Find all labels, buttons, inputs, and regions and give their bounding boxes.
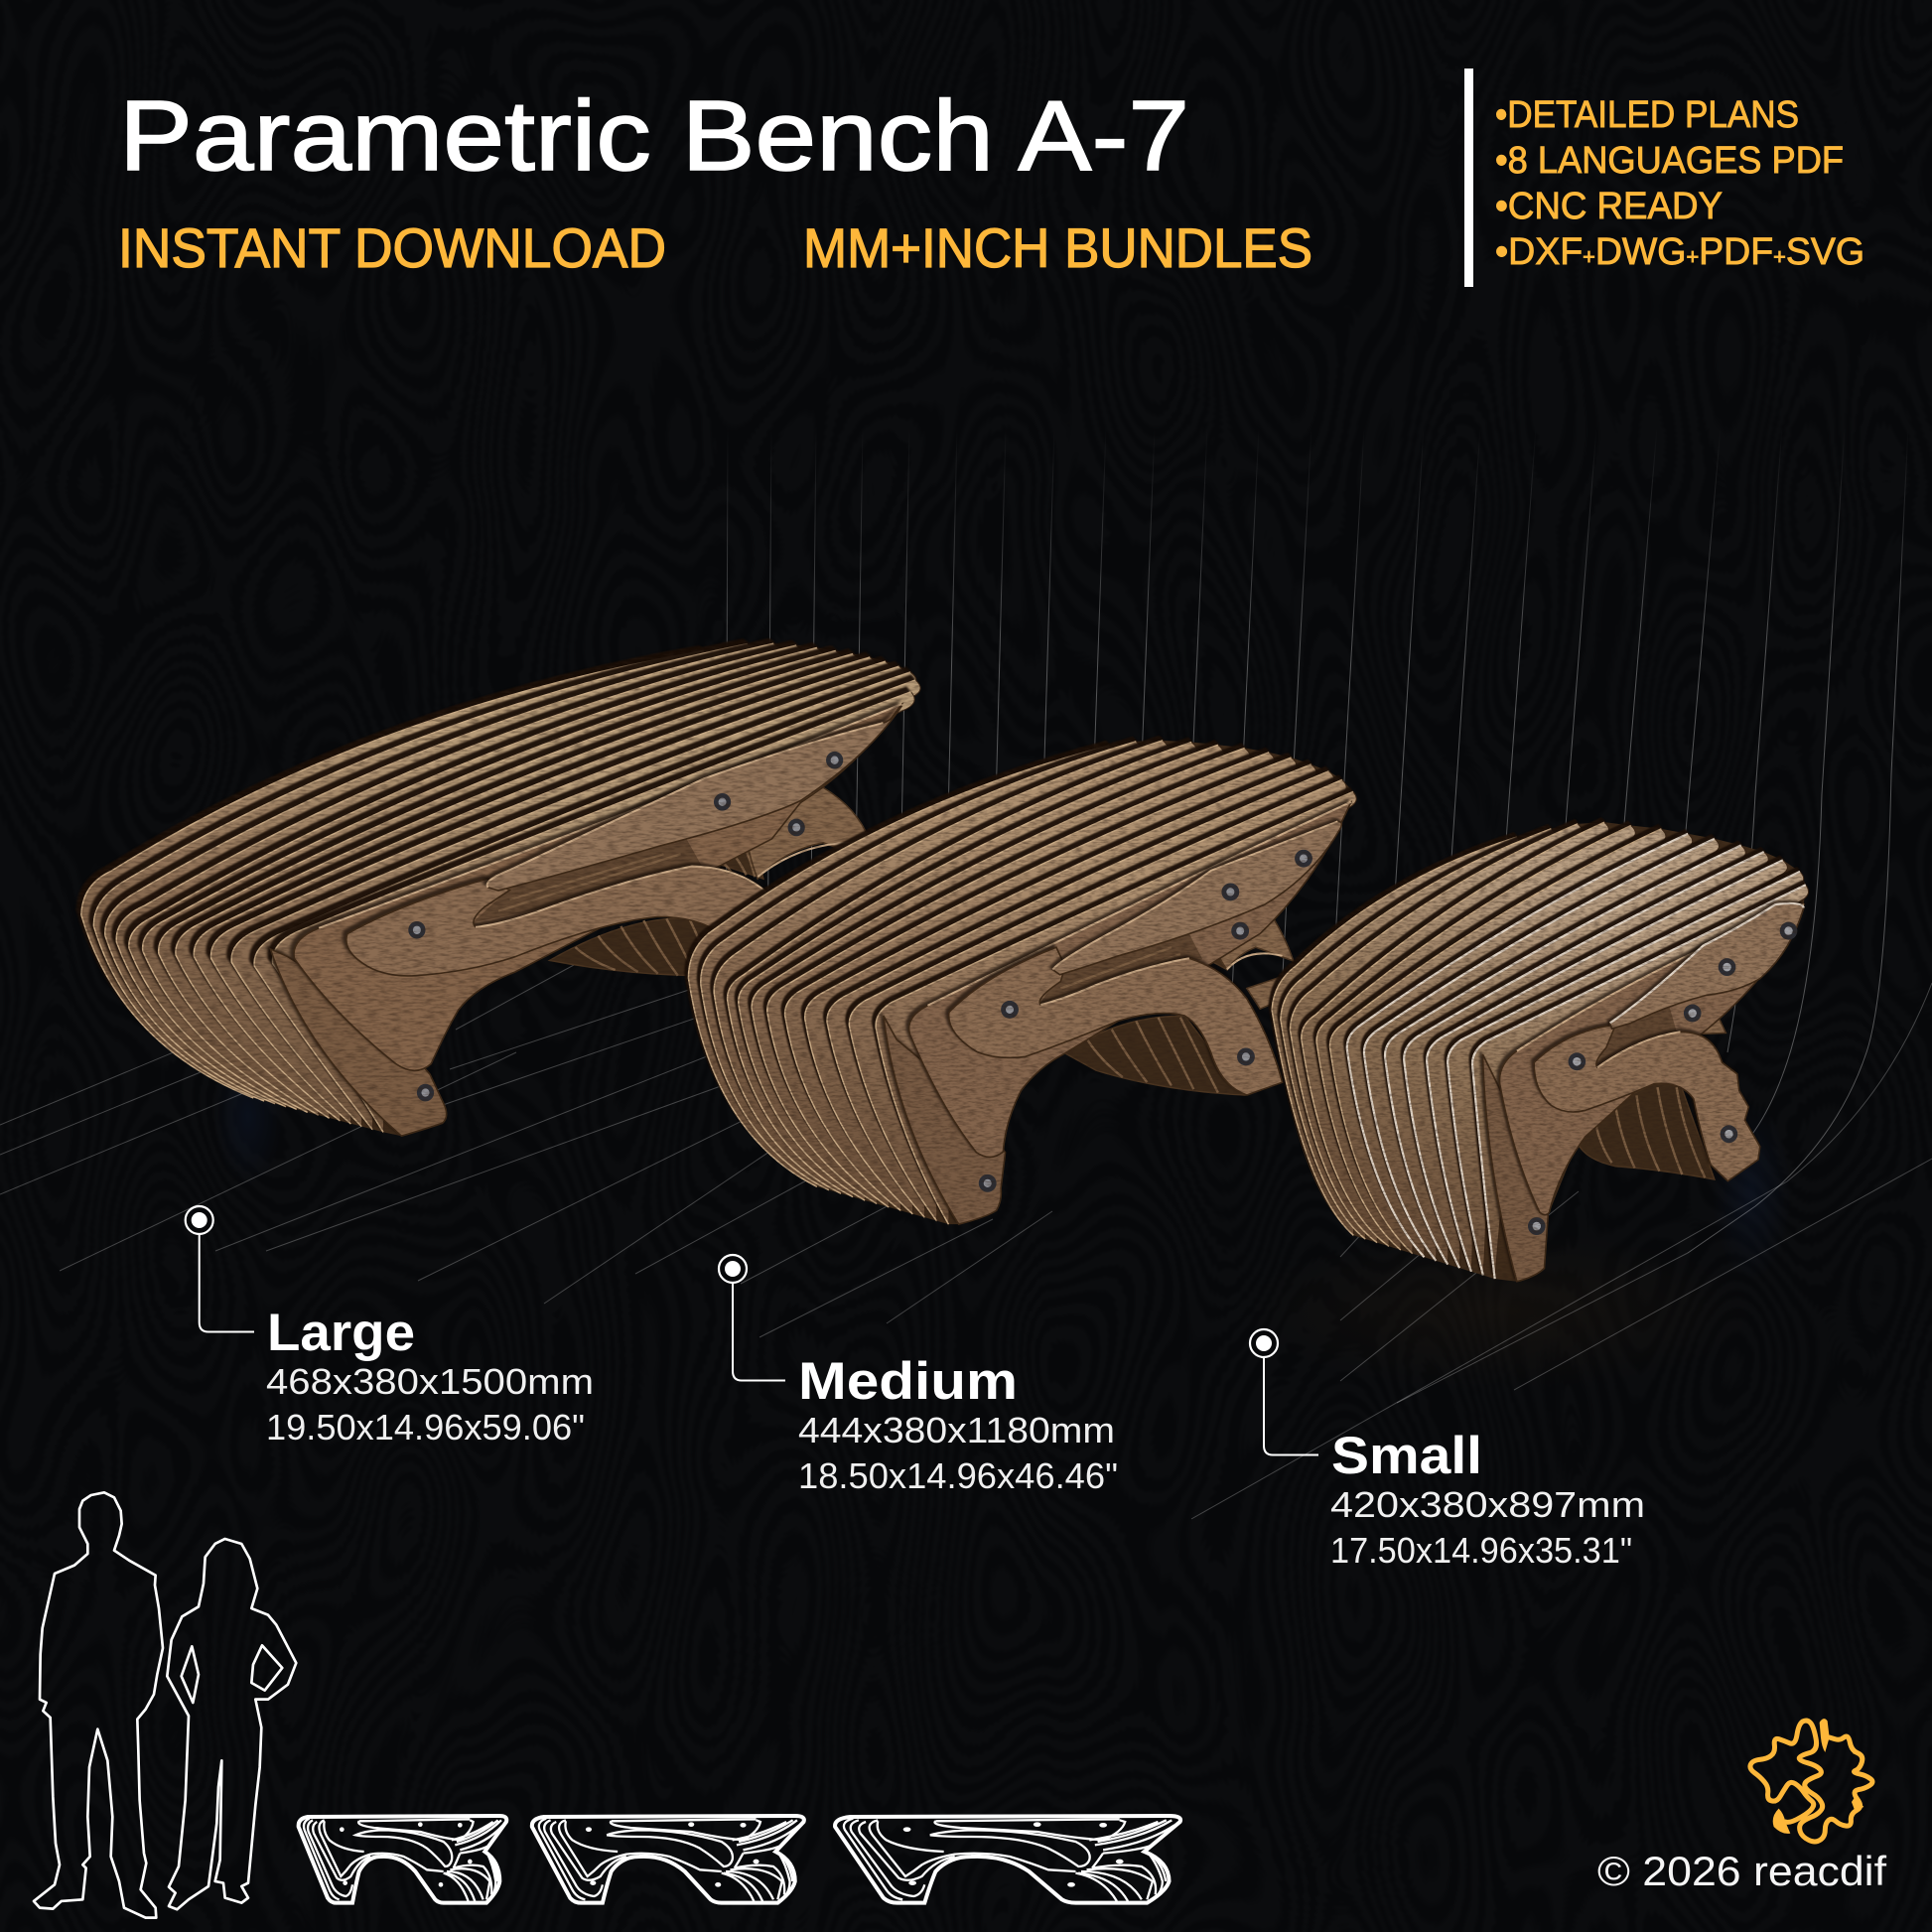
bolts <box>1528 922 1797 1235</box>
logo <box>1750 1719 1872 1842</box>
feature list: •CNC READY <box>1495 186 1723 227</box>
callout: small: 420x380x897mm <box>1330 1484 1645 1525</box>
vertical wall lines <box>726 427 1908 1253</box>
silhouette: man <box>34 1492 163 1918</box>
feature list: •DETAILED PLANS <box>1495 94 1799 136</box>
floor lines <box>0 953 1932 1519</box>
bench body base <box>84 643 915 1136</box>
front panels <box>270 704 901 1136</box>
feature list: •DXF+DWG+PDF+SVG <box>1495 231 1864 273</box>
callout: large: Large <box>267 1304 415 1362</box>
far leg and rear slats <box>550 787 869 976</box>
slats <box>81 643 920 1132</box>
callout: medium <box>719 1255 1118 1496</box>
icon: medium bench profile <box>532 1816 804 1903</box>
far leg and rear slats <box>1065 904 1294 1095</box>
slats <box>688 741 1356 1224</box>
subtitle: bundles: MM+INCH BUNDLES <box>803 216 1312 279</box>
callout: large: 19.50x14.96x59.06" <box>266 1407 585 1448</box>
bench: large <box>81 643 920 1136</box>
floor glow <box>213 1047 1791 1390</box>
bolts <box>979 850 1312 1192</box>
silhouette: woman <box>167 1539 296 1909</box>
title: Parametric Bench A-7 <box>119 80 1189 192</box>
copyright: © 2026 reacdif <box>1597 1848 1886 1894</box>
callout: small: Small <box>1331 1427 1482 1485</box>
feature list <box>1495 94 1864 273</box>
bench: small <box>1272 822 1809 1282</box>
bench: medium <box>688 741 1356 1224</box>
bench elevation icons <box>299 1816 1180 1903</box>
bench body base <box>690 741 1353 1224</box>
bench body base <box>1273 822 1806 1282</box>
human scale silhouettes <box>34 1492 296 1918</box>
callout: large <box>186 1206 594 1448</box>
icon: large bench profile <box>835 1816 1180 1903</box>
callout: medium: Medium <box>798 1352 1018 1411</box>
callout: small <box>1250 1329 1645 1571</box>
callout: medium: 444x380x1180mm <box>798 1410 1115 1450</box>
front panels <box>884 802 1351 1224</box>
callout: small: 17.50x14.96x35.31" <box>1330 1530 1632 1571</box>
callout: large: 468x380x1500mm <box>266 1361 594 1402</box>
icon: small bench profile <box>299 1816 506 1903</box>
front panels <box>1482 903 1804 1282</box>
callout: medium: 18.50x14.96x46.46" <box>798 1455 1118 1496</box>
vertical divider <box>1464 69 1473 287</box>
feature list: •8 LANGUAGES PDF <box>1495 140 1844 182</box>
bolts <box>408 752 843 1101</box>
subtitle: instant download: INSTANT DOWNLOAD <box>118 216 666 279</box>
far leg and rear slats <box>1578 997 1725 1179</box>
slats <box>1272 822 1809 1279</box>
